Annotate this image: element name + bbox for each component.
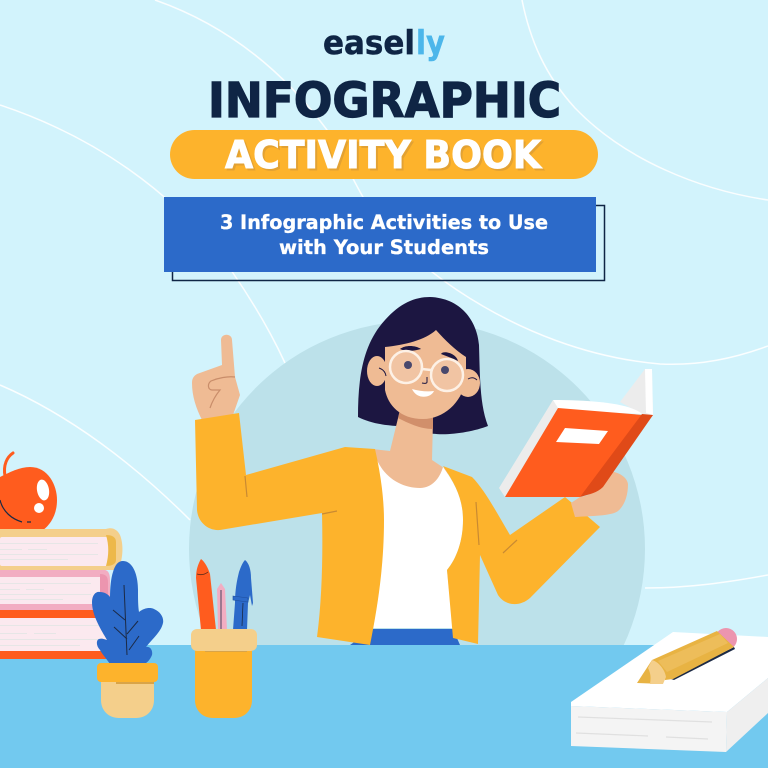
- subtitle pill: [170, 130, 598, 179]
- cup body: [195, 650, 252, 718]
- neck and chest: [372, 410, 450, 498]
- notebook and pencil: [571, 628, 768, 752]
- glasses: [390, 351, 463, 391]
- background circle: [189, 321, 645, 768]
- leaves: [92, 561, 163, 664]
- facial features: [379, 346, 477, 397]
- title: INFOGRAPHIC: [208, 73, 561, 129]
- blue trousers: [350, 629, 460, 645]
- banner: 3 Infographic Activities to Use: [220, 211, 548, 234]
- neck shadow: [398, 410, 433, 429]
- open book: [499, 369, 653, 497]
- right hand: [571, 472, 628, 517]
- orange crayon: [196, 559, 216, 630]
- top book: [0, 528, 122, 570]
- table: [0, 645, 768, 768]
- bottom book: [0, 610, 110, 659]
- logo: easelly: ly: [416, 23, 445, 62]
- raised hand: [192, 335, 240, 420]
- potted plant: [92, 561, 163, 718]
- apple: [0, 453, 57, 530]
- banner: with Your Students: [279, 236, 489, 259]
- pot: [101, 682, 154, 718]
- face: [385, 330, 466, 419]
- ears: [367, 356, 480, 397]
- subtitle pill: ACTIVITY BOOK: [227, 135, 544, 179]
- logo: easelly: easel: [323, 23, 415, 62]
- pencil: [637, 628, 737, 684]
- subtitle pill: ACTIVITY BOOK: [225, 133, 542, 177]
- teacher illustration: [192, 297, 653, 645]
- hair: [358, 297, 488, 434]
- left cardigan and raised arm: [195, 413, 384, 645]
- notebook: [571, 632, 768, 752]
- banner: [164, 197, 604, 280]
- blue pen: [233, 560, 253, 630]
- pencil cup: [191, 559, 257, 718]
- middle book: [0, 570, 110, 610]
- white shirt: [373, 460, 463, 628]
- right cardigan and arm: [443, 466, 600, 644]
- stack of books: [0, 528, 122, 659]
- pink pencil: [217, 583, 227, 630]
